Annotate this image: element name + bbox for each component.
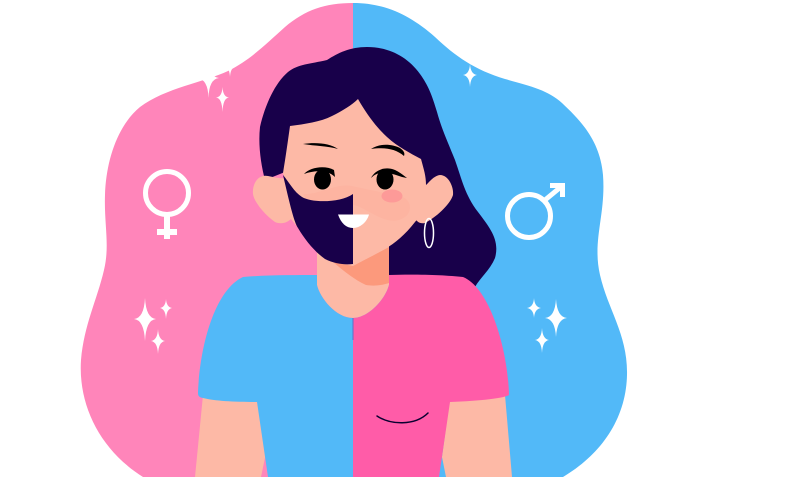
face bbox=[283, 99, 426, 263]
shirt centre seam bbox=[352, 318, 354, 340]
icon: female symbol bbox=[146, 172, 188, 239]
icon: male symbol bbox=[508, 186, 562, 238]
ear: left bbox=[253, 176, 299, 229]
shirt: blue half bbox=[198, 275, 353, 477]
eye: right bbox=[371, 168, 407, 190]
arm: left bbox=[195, 395, 266, 477]
neck bbox=[317, 240, 389, 318]
arm: right bbox=[442, 395, 512, 477]
shirt crease bbox=[377, 413, 428, 423]
eyebrow: left bbox=[303, 143, 338, 149]
sparkles: lower left bbox=[134, 298, 172, 354]
sparkles: upper left bbox=[202, 68, 232, 112]
hair bbox=[259, 47, 496, 295]
blob: blue right background bbox=[353, 3, 627, 477]
blob: pink left background bbox=[81, 3, 353, 477]
ear: right bbox=[415, 175, 453, 223]
cheek blush bbox=[382, 190, 402, 202]
blush shape across cheeks bbox=[303, 186, 410, 221]
neck shadow bbox=[333, 247, 389, 286]
sparkles: lower right bbox=[527, 298, 567, 353]
illustration: half-female half-male character bbox=[80, 3, 628, 477]
mouth: teeth bbox=[338, 214, 369, 228]
shirt: pink half bbox=[353, 275, 509, 477]
earring bbox=[424, 218, 434, 248]
beard bbox=[283, 175, 353, 264]
sparkle: top right bbox=[463, 64, 477, 87]
eyebrow: right bbox=[371, 145, 404, 156]
eye: left bbox=[304, 167, 335, 190]
